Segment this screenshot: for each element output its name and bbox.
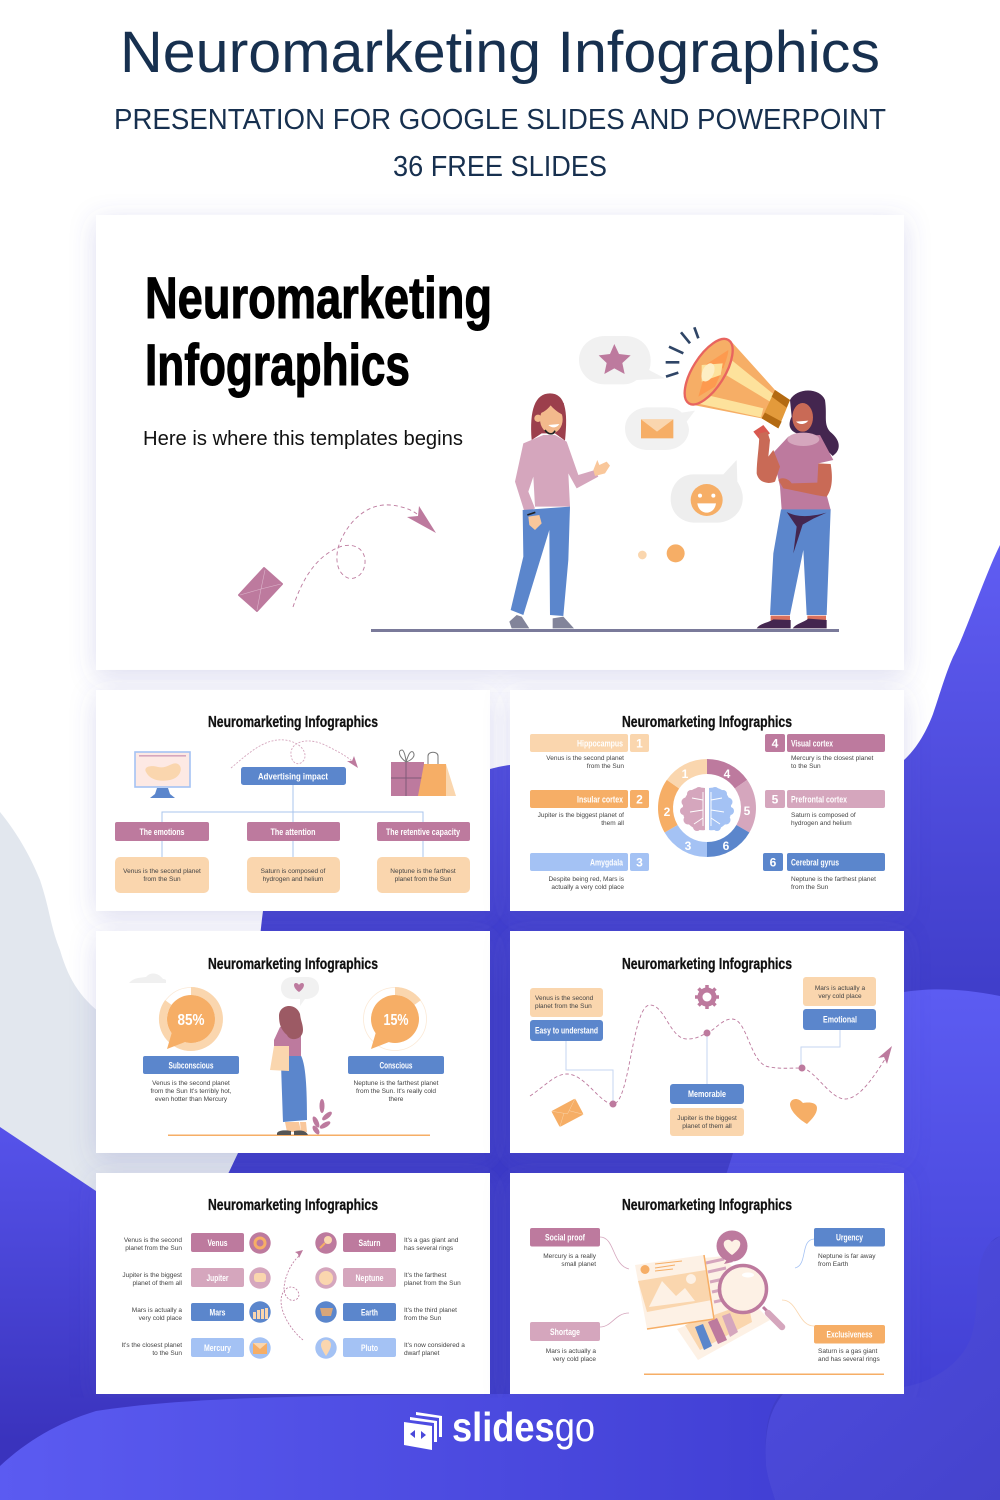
panel: wave timeline: [510, 931, 904, 1153]
subtitle: PRESENTATION FOR GOOGLE SLIDES AND POWERPOINT: [114, 104, 886, 136]
text: subconscious: from the Sun It's terribly hot,: [150, 1088, 232, 1095]
row: earth: from the Sun: [404, 1315, 442, 1322]
label: hippocampus: 1: [636, 736, 643, 750]
label: cerebral gyrus: Neptune is the farthest planet: [791, 876, 876, 883]
plant: [311, 1099, 333, 1136]
label: visual cortex: to the Sun: [791, 763, 821, 770]
row: earth: It's the third planet: [404, 1307, 457, 1314]
row: mars: Mars is actually a: [132, 1307, 182, 1314]
slidesgo logo: [404, 1404, 595, 1450]
illustration: chart sheet and post: [635, 1255, 770, 1360]
label: insular cortex: [530, 790, 649, 827]
box: attention: The attention: [270, 827, 316, 838]
row: venus: Venus is the second: [124, 1237, 182, 1244]
label: cerebral gyrus: Cerebral gyrus: [791, 858, 839, 868]
row: neptune: planet from the Sun: [404, 1280, 461, 1287]
connector lines: [162, 784, 423, 857]
block: memorable: planet of them all: [682, 1123, 732, 1130]
box: shortage: Shortage: [550, 1327, 580, 1338]
block: memorable: Memorable: [688, 1089, 726, 1100]
row: venus: [124, 1232, 271, 1254]
lower left wave: [0, 1394, 780, 1500]
connectors: [600, 1237, 814, 1327]
label: cerebral gyrus: 6: [770, 856, 777, 870]
panel: analysis illustration: [510, 1173, 904, 1394]
box: social proof: [530, 1228, 600, 1268]
icon: gear: [695, 985, 719, 1009]
box: advertising impact: [241, 767, 346, 785]
cover heading: Infographics: [145, 333, 410, 398]
cloud: [129, 973, 166, 983]
heading: Neuromarketing Infographics: [208, 1197, 378, 1214]
label: prefrontal cortex: Prefrontal cortex: [791, 794, 848, 806]
label: insular cortex: Jupiter is the biggest planet of: [538, 812, 624, 819]
label: amygdala: 3: [636, 856, 643, 870]
row: pluto: dwarf planet: [404, 1350, 440, 1357]
box: conscious: Conscious: [380, 1060, 412, 1072]
box: exclusiveness: Saturn is a gas giant: [818, 1348, 877, 1355]
box: social proof: Social proof: [545, 1232, 586, 1244]
megaphone: [675, 332, 790, 440]
label: insular cortex: them all: [601, 820, 625, 827]
panel: cover slide: [96, 215, 904, 670]
box: urgency: from Earth: [818, 1261, 849, 1268]
dotted arrow: [281, 1250, 303, 1340]
text box: emotions: from the Sun: [143, 876, 181, 883]
label: hippocampus: [530, 734, 649, 770]
row: jupiter: [122, 1267, 271, 1289]
text box: attention: [247, 857, 340, 893]
chart: 85 percent: [160, 988, 222, 1050]
block: easy to understand: Easy to understand: [535, 1026, 598, 1036]
block: easy to understand: [530, 988, 603, 1041]
row: mercury: It's the closest planet: [122, 1342, 182, 1349]
icon: gift and bag: [391, 750, 456, 796]
label: insular cortex: 2: [636, 792, 643, 806]
speech bubble: star: [579, 336, 665, 384]
block: emotional: very cold place: [818, 993, 862, 1000]
box: subconscious: [143, 1056, 239, 1074]
box: urgency: Neptune is far away: [818, 1253, 876, 1260]
label: amygdala: Amygdala: [590, 858, 624, 868]
text: subconscious: [150, 1080, 232, 1103]
arrow head: [878, 1046, 892, 1064]
chart: 15 percent: 15%: [384, 1012, 409, 1029]
row: mercury: Mercury: [204, 1343, 232, 1354]
box: exclusiveness: and has several rings: [818, 1356, 881, 1363]
cover heading: Neuromarketing: [145, 266, 492, 331]
row: neptune: Neptune: [356, 1273, 384, 1284]
ground line: [371, 629, 839, 632]
icon: heart: [790, 1099, 817, 1124]
row: mercury: to the Sun: [152, 1350, 182, 1357]
panel: planets list: [96, 1173, 490, 1394]
row: mars: very cold place: [139, 1315, 182, 1322]
dotted arrow: [231, 740, 358, 768]
connector lines: [566, 1030, 840, 1104]
logo wordmark: slidesgo: [452, 1404, 595, 1450]
text: subconscious: even hotter than Mercury: [155, 1096, 228, 1103]
row: earth: [315, 1301, 457, 1323]
decorative dots: [638, 544, 685, 562]
text: subconscious: Venus is the second planet: [152, 1080, 230, 1087]
box: shortage: [530, 1322, 600, 1363]
label: hippocampus: Venus is the second planet: [546, 755, 624, 762]
text box: attention: Saturn is composed of: [261, 868, 326, 875]
row: jupiter: Jupiter is the biggest: [122, 1272, 182, 1279]
speech bubble: smile: [671, 460, 743, 523]
row: jupiter: planet of them all: [132, 1280, 183, 1287]
row: pluto: [315, 1337, 465, 1359]
box: advertising impact: Advertising impact: [258, 772, 329, 782]
donut chart: 6: [723, 839, 730, 853]
light wave: [702, 989, 1000, 1389]
box: retentive capacity: [377, 822, 470, 841]
label: visual cortex: Mercury is the closest planet: [791, 755, 874, 762]
ground line: [644, 1374, 884, 1375]
woman from behind: [270, 1006, 308, 1135]
box: conscious: [348, 1056, 444, 1074]
box: exclusiveness: Exclusiveness: [826, 1330, 872, 1340]
text: conscious: there: [389, 1096, 404, 1103]
donut chart: 3: [685, 839, 692, 853]
label: prefrontal cortex: hydrogen and helium: [791, 820, 852, 827]
row: venus: Venus: [208, 1238, 228, 1249]
row: saturn: Saturn: [358, 1238, 381, 1249]
label: cerebral gyrus: [763, 853, 885, 891]
text box: retentive: Neptune is the farthest: [390, 868, 456, 875]
box: emotions: [115, 822, 209, 841]
row: saturn: has several rings: [404, 1245, 454, 1252]
block: memorable: Jupiter is the biggest: [677, 1115, 737, 1122]
label: prefrontal cortex: [765, 790, 885, 827]
icon: envelope: [551, 1098, 584, 1127]
block: easy to understand: planet from the Sun: [535, 1003, 592, 1010]
woman with sweater: [509, 393, 610, 628]
box: exclusiveness: [814, 1325, 885, 1363]
row: mercury: [122, 1337, 271, 1359]
panel: brain diagram: [510, 690, 904, 911]
box: retentive capacity: The retentive capacity: [386, 827, 461, 838]
text box: emotions: Venus is the second planet: [123, 868, 201, 875]
row: mars: Mars: [210, 1308, 226, 1318]
row: venus: planet from the Sun: [125, 1245, 182, 1252]
label: visual cortex: [765, 734, 885, 770]
magnifier: [720, 1266, 782, 1327]
title: Neuromarketing Infographics: [120, 20, 880, 85]
panel: conscious vs subconscious: [96, 931, 490, 1153]
row: pluto: It's now considered a: [404, 1342, 465, 1349]
text box: retentive: [377, 857, 470, 893]
illustration: two women and megaphone: [509, 327, 839, 628]
chart: 15 percent: [364, 988, 426, 1050]
text: conscious: from the Sun. It's really cold: [356, 1088, 436, 1095]
left blue wedge: [0, 1127, 200, 1500]
block: easy to understand: Venus is the second: [535, 995, 594, 1002]
woman with megaphone: [757, 390, 839, 628]
label: prefrontal cortex: 5: [772, 792, 779, 806]
icon: monitor: [135, 752, 190, 798]
box: social proof: small planet: [561, 1261, 596, 1268]
donut chart: 5: [744, 804, 751, 818]
row: neptune: It's the farthest: [404, 1272, 447, 1279]
box: social proof: Mercury is a really: [543, 1253, 597, 1260]
box: attention: [247, 822, 340, 841]
box: urgency: [814, 1228, 885, 1268]
label: visual cortex: Visual cortex: [791, 738, 834, 750]
heading: Neuromarketing Infographics: [622, 1197, 792, 1214]
row: saturn: It's a gas giant and: [404, 1237, 459, 1244]
heading: Neuromarketing Infographics: [208, 956, 378, 973]
icon: brain: [680, 787, 734, 831]
row: pluto: Pluto: [361, 1343, 378, 1354]
box: emotions: The emotions: [140, 827, 184, 838]
label: hippocampus: from the Sun: [587, 763, 624, 770]
panel: advertising impact: [96, 690, 490, 911]
row: jupiter: Jupiter: [206, 1273, 229, 1284]
label: cerebral gyrus: from the Sun: [791, 884, 829, 891]
box: shortage: Mars is actually a: [546, 1348, 596, 1355]
donut chart: 1: [682, 767, 689, 781]
label: visual cortex: 4: [772, 736, 779, 750]
text: conscious: [354, 1080, 439, 1103]
icon: heart bubble: [716, 1230, 748, 1264]
heading: Neuromarketing Infographics: [208, 714, 378, 731]
block: emotional: Emotional: [823, 1014, 857, 1026]
donut chart: 4: [724, 767, 731, 781]
milestone dots: [610, 1030, 806, 1108]
heading: Neuromarketing Infographics: [622, 714, 792, 731]
text box: emotions: [115, 857, 209, 893]
row: saturn: [315, 1232, 459, 1254]
row: neptune: [315, 1267, 461, 1289]
speech bubble: mail: [625, 407, 695, 450]
blue wave: [0, 545, 1000, 1500]
box: urgency: Urgency: [836, 1232, 864, 1244]
chart: 85 percent: 85%: [178, 1012, 205, 1029]
ground line: [168, 1134, 430, 1136]
block: emotional: [803, 977, 876, 1030]
dashed arrow: [293, 505, 436, 607]
sound rays: [666, 327, 698, 377]
block: memorable: [670, 1084, 744, 1136]
block: emotional: Mars is actually a: [815, 985, 865, 992]
cover subheading: Here is where this templates begins: [143, 428, 463, 450]
box: subconscious: Subconscious: [168, 1060, 214, 1072]
text box: retentive: planet from the Sun: [395, 876, 452, 883]
text box: attention: hydrogen and helium: [263, 876, 323, 883]
box: shortage: very cold place: [553, 1356, 596, 1363]
grey wave: [0, 812, 300, 1200]
label: amygdala: [530, 853, 649, 891]
label: prefrontal cortex: Saturn is composed of: [791, 812, 856, 819]
dashed wave: [530, 1005, 887, 1104]
icon: envelope: [239, 568, 282, 611]
slide count: 36 FREE SLIDES: [393, 151, 607, 183]
text: conscious: Neptune is the farthest planet: [354, 1080, 439, 1087]
label: amygdala: actually a very cold place: [551, 884, 624, 891]
heading: Neuromarketing Infographics: [622, 956, 792, 973]
row: mars: [132, 1301, 271, 1323]
label: insular cortex: Insular cortex: [577, 794, 624, 806]
speech bubble: heart: [281, 977, 319, 1006]
label: hippocampus: Hippocampus: [577, 738, 623, 750]
row: earth: Earth: [361, 1308, 378, 1318]
lower right wave: [766, 1236, 1000, 1500]
cover heading: [145, 266, 492, 398]
donut chart: [664, 766, 751, 853]
logo icon: [404, 1412, 442, 1450]
donut chart: 2: [664, 805, 671, 819]
label: amygdala: Despite being red, Mars is: [548, 876, 625, 883]
